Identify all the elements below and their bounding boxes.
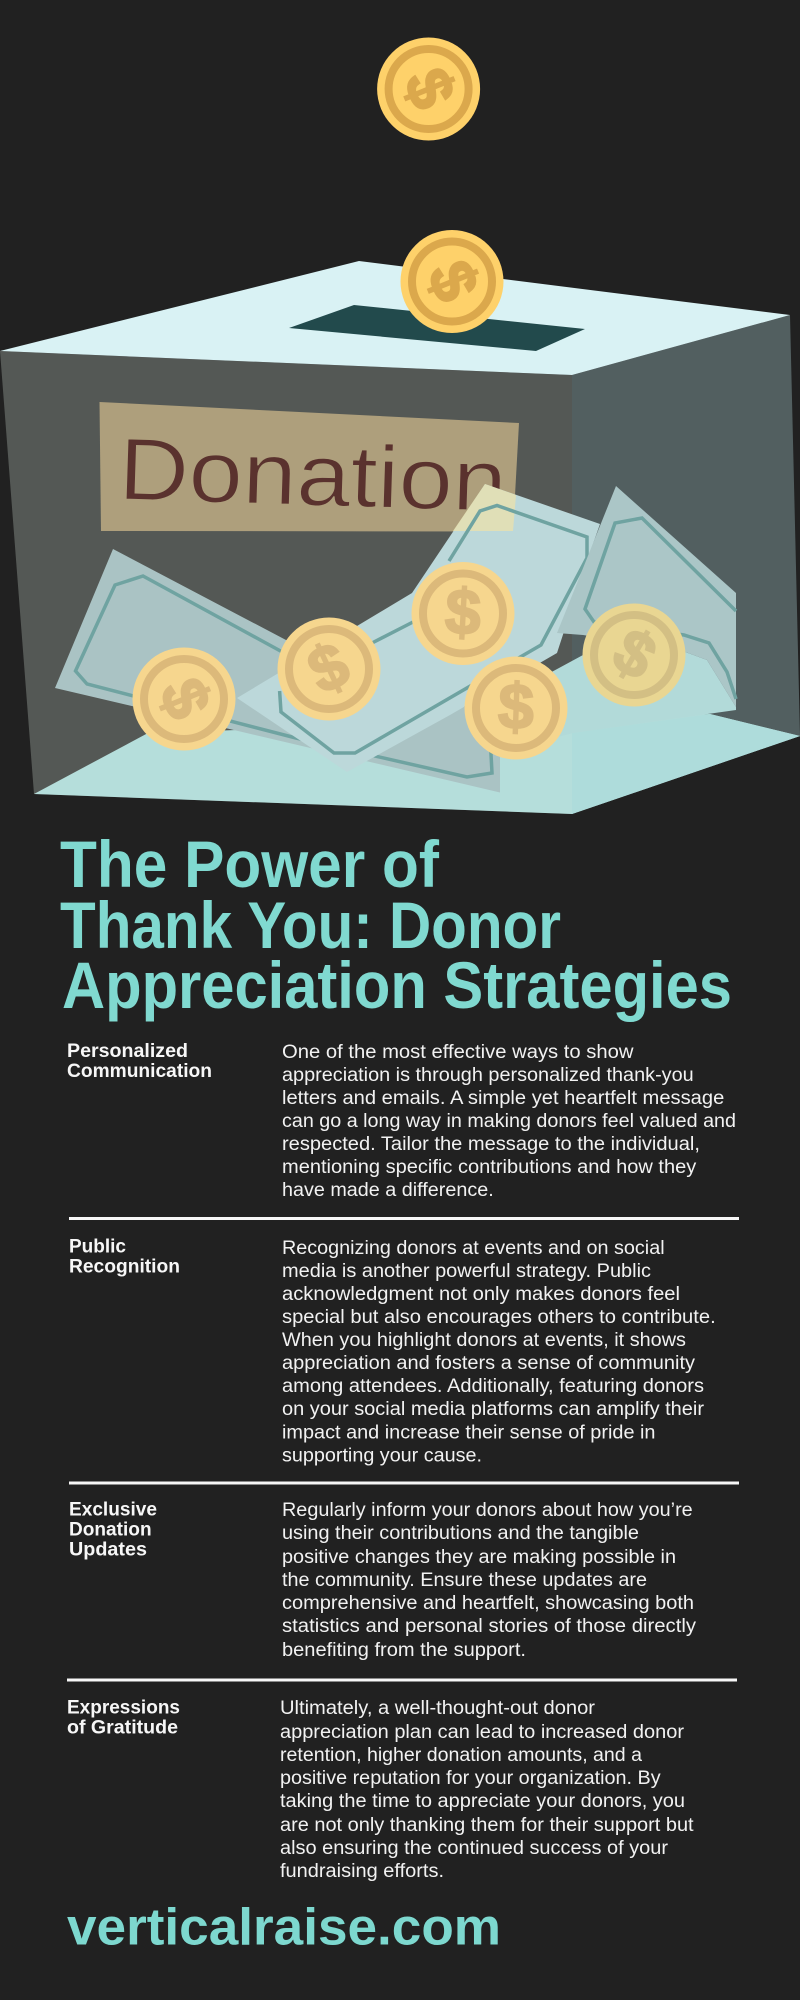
text block: exclusive donation updates: benefiting from the support. xyxy=(282,1640,526,1661)
heading: Exclusive Donation Updates xyxy=(69,1498,157,1560)
text block: public recognition: supporting your cause. xyxy=(282,1446,482,1466)
text block: expressions of gratitude: also ensuring the continued success of your xyxy=(280,1838,669,1859)
heading: Personalized Communication xyxy=(67,1040,212,1082)
text block: exclusive donation updates xyxy=(282,1500,697,1661)
text block: exclusive donation updates: the community. Ensure these updates are xyxy=(282,1570,647,1591)
heading: Expressions of Gratitude xyxy=(67,1696,180,1738)
text block: personalized communication: have made a difference. xyxy=(282,1180,494,1201)
box front face xyxy=(0,351,572,814)
heading: Public Recognition: Recognition xyxy=(69,1256,180,1278)
text block: personalized communication: can go a long way in making donors feel valued and xyxy=(282,1111,736,1132)
icon: falling coin xyxy=(377,38,480,140)
heading: Public Recognition xyxy=(69,1236,180,1278)
text block: expressions of gratitude xyxy=(280,1698,694,1882)
text block: expressions of gratitude: are not only thanking them for their support but xyxy=(280,1815,694,1836)
footer url: verticalraise.com xyxy=(67,1898,501,1956)
text block: public recognition xyxy=(282,1238,716,1466)
heading: Expressions of Gratitude: of Gratitude xyxy=(67,1716,178,1738)
title: The Power of xyxy=(60,827,440,901)
title: Thank You: Donor xyxy=(60,888,561,962)
text block: public recognition: impact and increase their sense of pride in xyxy=(282,1422,656,1444)
text block: personalized communication: letters and emails. A simple yet heartfelt message xyxy=(282,1088,724,1109)
bill: right xyxy=(557,486,736,707)
text block: public recognition: Recognizing donors at events and on social xyxy=(282,1238,665,1259)
text block: exclusive donation updates: comprehensive and heartfelt, showcasing both xyxy=(282,1593,694,1614)
text block: public recognition: on your social media platforms can amplify their xyxy=(282,1399,705,1420)
text block: public recognition: special but also encourages others to contribute. xyxy=(282,1307,716,1328)
icon: coin entering slot xyxy=(400,230,504,333)
heading: Personalized Communication: Personalized xyxy=(67,1040,188,1062)
text block: public recognition: among attendees. Additionally, featuring donors xyxy=(282,1376,704,1397)
heading: Exclusive Donation Updates: Donation xyxy=(69,1518,152,1540)
text block: expressions of gratitude: fundraising efforts. xyxy=(280,1861,444,1882)
text block: personalized communication xyxy=(282,1042,736,1201)
bill: bottom light xyxy=(500,650,736,752)
text block: exclusive donation updates: positive changes they are making possible in xyxy=(282,1547,676,1568)
text block: exclusive donation updates: Regularly inform your donors about how you’re xyxy=(282,1500,693,1521)
icon: coin entering slot: $ xyxy=(413,251,493,311)
text block: public recognition: appreciation and fosters a sense of community xyxy=(282,1353,696,1374)
text block: expressions of gratitude: appreciation plan can lead to increased donor xyxy=(280,1722,685,1743)
icon: coin in box 4 xyxy=(464,656,568,760)
bill: middle xyxy=(237,484,600,772)
icon: coin in box 5 xyxy=(582,604,686,706)
heading: Expressions of Gratitude: Expressions xyxy=(67,1696,180,1718)
lid slot xyxy=(289,305,585,351)
text block: expressions of gratitude: retention, higher donation amounts, and a xyxy=(280,1745,642,1766)
text block: public recognition: media is another powerful strategy. Public xyxy=(282,1261,651,1282)
text block: expressions of gratitude: positive reputation for your organization. By xyxy=(280,1768,661,1789)
text block: public recognition: acknowledgment not only makes donors feel xyxy=(282,1284,680,1305)
text block: personalized communication: respected. Tailor the message to the individual, xyxy=(282,1134,700,1155)
box lid xyxy=(0,261,790,375)
heading: Public Recognition: Public xyxy=(69,1236,126,1258)
heading: Personalized Communication: Communication xyxy=(67,1060,212,1082)
box floor xyxy=(34,714,800,814)
title: Appreciation Strategies xyxy=(62,948,732,1022)
label word: Donation xyxy=(117,419,508,530)
text block: expressions of gratitude: Ultimately, a well-thought-out donor xyxy=(280,1698,596,1719)
heading: Exclusive Donation Updates: Updates xyxy=(69,1538,147,1560)
text block: expressions of gratitude: taking the time to appreciate your donors, you xyxy=(280,1791,685,1812)
icon: coin in box 2: $ xyxy=(297,627,360,708)
icon: coin in box 3 xyxy=(412,562,514,665)
icon: coin in box 4: $ xyxy=(497,670,535,743)
icon: falling coin: $ xyxy=(390,58,470,118)
text block: personalized communication: mentioning specific contributions and how they xyxy=(282,1157,697,1178)
text block: exclusive donation updates: using their contributions and the tangible xyxy=(282,1523,639,1544)
box floor right part xyxy=(572,714,800,814)
donation label xyxy=(100,402,519,532)
text block: personalized communication: appreciation is through personalized thank-you xyxy=(282,1065,694,1086)
icon: coin in box 5: $ xyxy=(601,614,668,694)
icon: coin in box 3: $ xyxy=(443,575,483,649)
title xyxy=(60,827,732,1022)
icon: coin in box 1 xyxy=(132,648,236,750)
icon: coin in box 2 xyxy=(278,618,380,720)
text block: public recognition: When you highlight donors at events, it shows xyxy=(282,1330,686,1351)
icon: coin in box 1: $ xyxy=(145,668,225,728)
text block: exclusive donation updates: statistics and personal stories of those directly xyxy=(282,1616,697,1637)
illustration: donation box with coins and bills xyxy=(0,38,800,814)
bill: left xyxy=(55,549,500,792)
heading: Exclusive Donation Updates: Exclusive xyxy=(69,1498,157,1520)
text block: personalized communication: One of the most effective ways to show xyxy=(282,1042,634,1063)
box right face xyxy=(572,315,800,814)
